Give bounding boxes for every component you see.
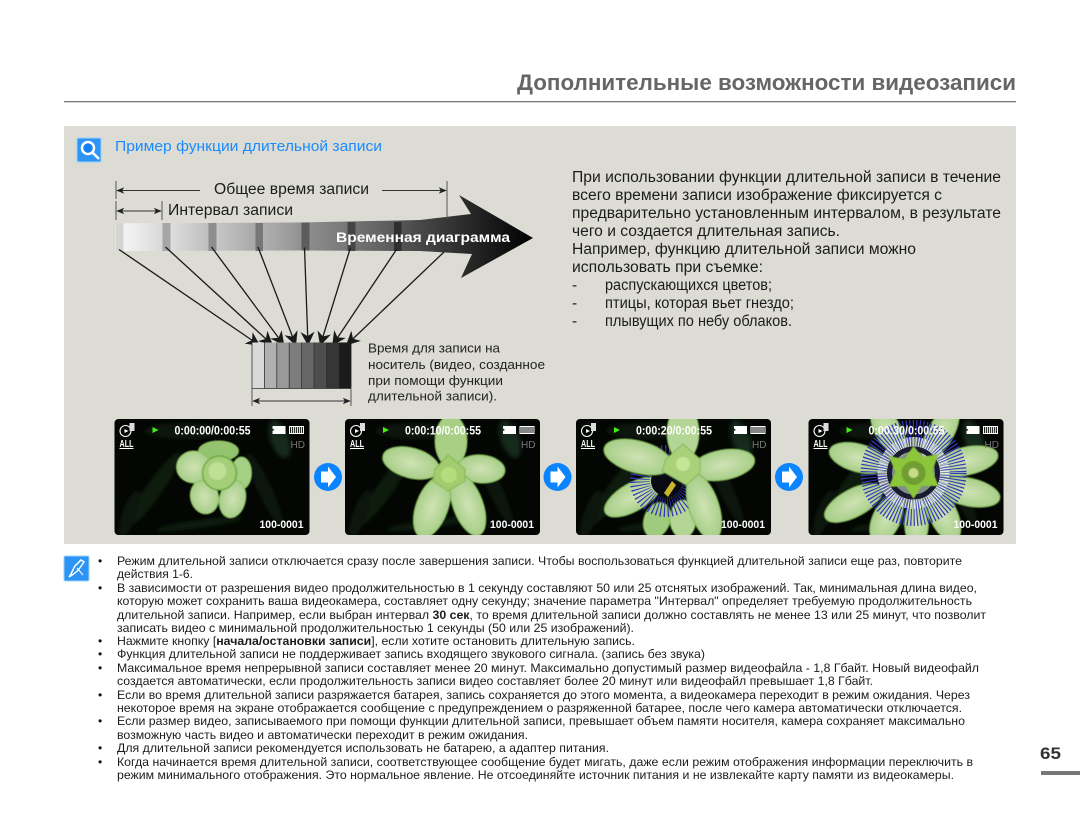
screen status overlay [814, 423, 999, 531]
description text: птицы, которая вьет гнездо; [605, 295, 794, 312]
note text: Нажмите кнопку [ начала/остановки записи ], если хотите остановить длительную запись. [117, 635, 635, 648]
note bullets: • [98, 661, 102, 675]
note text: Если размер видео, записываемого при помощи функции длительной записи, превышает объем памяти носителя, камера сохраняет максимально [117, 715, 965, 728]
note bullets: • [98, 581, 102, 595]
note text: Режим длительной записи отключается сразу после завершения записи. Чтобы воспользоваться функцией длительной записи еще раз, повторите [117, 555, 962, 568]
strip caption: при помощи функции [368, 373, 503, 388]
note text: действия 1-6. [117, 568, 193, 581]
interval span: Интервал записи [168, 202, 293, 219]
page number: 65 [1040, 744, 1061, 763]
screen 4: open passion flower [808, 419, 1004, 535]
arrow: step 2 [544, 463, 572, 491]
note bullets [98, 554, 102, 769]
note text: В зависимости от разрешения видео продолжительностью в 1 секунду составляют 50 или 25 отснятых изображений. Так, минимальная длина видео, [117, 582, 977, 595]
strip caption: длительной записи). [368, 388, 497, 404]
strip caption: носитель (видео, созданное [368, 357, 545, 372]
screen 1: closed bud [114, 417, 310, 540]
title: Дополнительные возможности видеозаписи [517, 70, 1016, 95]
description text: использовать при съемке: [572, 259, 763, 276]
note text: длительной записи. Например, если выбран интервал 30 сек, то время длительной записи должно составлять не менее 13 или 25 минут, что позволит [117, 609, 987, 622]
screen status overlay [120, 423, 305, 531]
description text: чего и создается длительная запись. [572, 223, 840, 240]
note bullets: • [98, 647, 102, 661]
screen 3: half open flower [576, 419, 771, 535]
strip caption: Время для записи на [368, 340, 501, 356]
arrow: step 3 [775, 463, 803, 491]
description text: всего времени записи изображение фиксируется с [572, 187, 942, 204]
note text: создается автоматически, если продолжительность записи видео составляет более 20 минут или видеофайл превышает 1,8 Гбайт. [117, 675, 873, 688]
panel: example [64, 126, 1016, 548]
total time span: Общее время записи [214, 181, 369, 198]
screen status overlay: 0:00:00/0:00:55 [174, 424, 251, 438]
screen status overlay [581, 423, 766, 531]
frame mapping arrows [119, 247, 444, 345]
screen status overlay: 0:00:10/0:00:55 [405, 424, 481, 438]
note bullets: • [98, 741, 102, 755]
notes list [98, 554, 987, 782]
note text: возможную часть видео и автоматически переходит в режим ожидания. [117, 729, 528, 742]
screen status overlay [350, 423, 535, 531]
note text: некоторое время на экране отображается сообщение с предупреждением о разряженной батарее, после чего камера автоматически отключается. [117, 702, 962, 715]
note text: которую может сохранить ваша видеокамера, составляет одну секунду; значение параметра "Интервал" определяет требуемую продолжительность [117, 595, 972, 608]
icon: note [64, 556, 89, 581]
icon: magnifier [77, 138, 101, 162]
page number [1040, 744, 1080, 775]
note text: Максимальное время непрерывной записи составляет менее 20 минут. Максимально допустимый размер видеофайла - 1,8 Гбайт. Новый видеофайл [117, 662, 979, 675]
note text: Когда начинается время длительной записи, соответствующее сообщение будет мигать, даже если режим отображения информации переключить в [117, 756, 973, 769]
note text [117, 555, 987, 782]
note bullets: • [98, 688, 102, 702]
note text: записать видео с минимальной продолжительностью 1 секунды (50 или 25 изображений). [117, 622, 634, 635]
description text: - [572, 277, 577, 294]
note text: Если во время длительной записи разряжается батарея, запись сохраняется до этого момента, а видеокамера переходит в режим ожидания. Через [117, 689, 970, 702]
screen 2: opening flower [345, 415, 540, 543]
description text: - [572, 313, 577, 330]
arrow: step 1 [314, 463, 342, 491]
note bullets: • [98, 634, 102, 648]
description text: - [572, 295, 577, 312]
note text: режим минимального отображения. Это нормальное явление. Не отсоединяйте источник питания и не извлекайте карту памяти из видеокамеры. [117, 769, 954, 782]
timeline arrow [115, 195, 533, 278]
note bullets: • [98, 554, 102, 568]
panel heading: Пример функции длительной записи [115, 138, 382, 155]
note bullets: • [98, 714, 102, 728]
description text: При использовании функции длительной записи в течение [572, 169, 1001, 186]
screen status overlay: 0:00:30/0:00:55 [868, 424, 945, 438]
description text: предварительно установленным интервалом, в результате [572, 205, 1001, 222]
description text: распускающихся цветов; [605, 277, 772, 294]
description text: плывущих по небу облаков. [605, 313, 792, 330]
description text [572, 169, 1001, 330]
screen status overlay: 0:00:20/0:00:55 [636, 424, 712, 438]
note bullets: • [98, 755, 102, 769]
timeline label: Временная диаграмма [336, 229, 510, 245]
note text: Для длительной записи рекомендуется использовать не батарею, а адаптер питания. [117, 742, 609, 755]
note text: Функция длительной записи не поддерживает запись входящего звукового сигнала. (запись без звука) [117, 648, 705, 661]
strip caption [368, 340, 545, 404]
compressed video strip [252, 342, 351, 406]
description text: Например, функцию длительной записи можно [572, 241, 916, 258]
